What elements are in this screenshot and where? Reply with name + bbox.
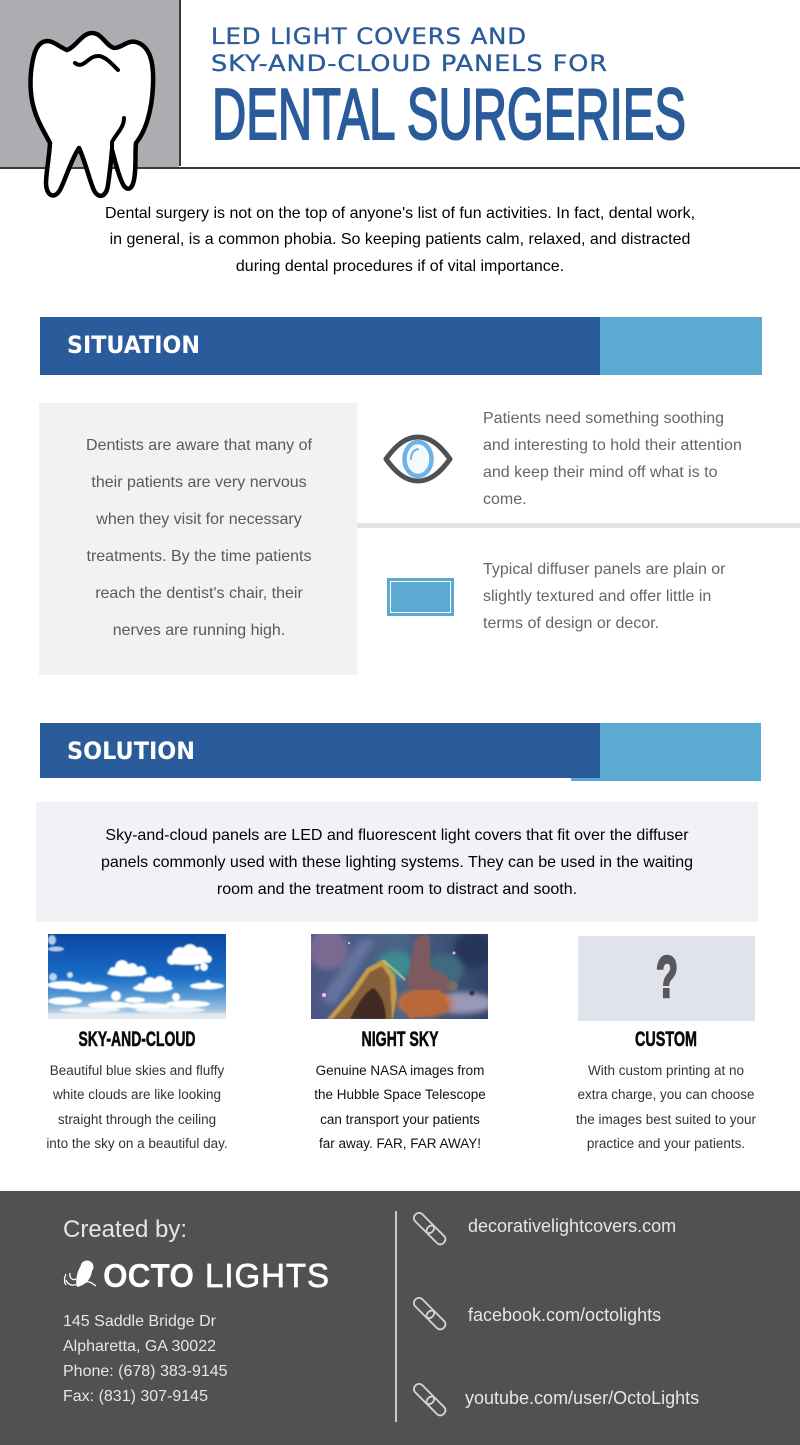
created by: Created by: [63, 1216, 187, 1243]
intro text: during dental procedures if of vital importance. [236, 258, 564, 275]
panel: situation text: treatments. By the time patients [86, 548, 312, 565]
panel: solution text [36, 802, 758, 922]
icon: tooth [30, 33, 153, 196]
icon: link website [412, 1211, 447, 1246]
panel: situation text: reach the dentist's chair, their [95, 585, 303, 602]
intro text [105, 205, 695, 275]
link: website: decorativelightcovers.com [468, 1216, 676, 1236]
column: night sky: Genuine NASA images from [316, 1063, 484, 1078]
intro text: Dental surgery is not on the top of anyone's list of fun activities. In fact, dental work, [105, 205, 695, 222]
column: custom: the images best suited to your [576, 1112, 757, 1127]
address: Fax: (831) 307-9145 [63, 1388, 208, 1405]
column: sky-and-cloud: straight through the ceiling [58, 1112, 216, 1127]
image: sky and clouds [47, 934, 226, 1019]
icon: eye [386, 437, 450, 481]
icon: link youtube [412, 1382, 447, 1417]
image: nebula [308, 930, 494, 1019]
address: Alpharetta, GA 30022 [63, 1338, 216, 1355]
link: youtube: youtube.com/user/OctoLights [465, 1388, 699, 1408]
link: facebook: facebook.com/octolights [468, 1305, 661, 1325]
panel: solution text: Sky-and-cloud panels are LED and fluorescent light covers that fit over the diffuser [105, 827, 689, 844]
address [63, 1313, 228, 1405]
title: SKY-AND-CLOUD PANELS FOR [211, 52, 608, 77]
column: night sky: NIGHT SKY [362, 1028, 438, 1051]
logo: octo lights [64, 1257, 329, 1294]
column: sky-and-cloud [46, 1028, 228, 1151]
title [211, 25, 686, 155]
text block: attention: come. [483, 491, 527, 508]
column: night sky [314, 1028, 486, 1151]
text block: attention: and keep their mind off what is to [483, 464, 718, 481]
image: custom placeholder: ? [656, 945, 678, 1010]
heading: solution [40, 723, 761, 781]
text block: attention [483, 410, 742, 508]
column: custom: extra charge, you can choose [577, 1087, 755, 1102]
icon: diffuser panel [387, 578, 454, 616]
text block: attention: and interesting to hold their attention [483, 437, 742, 454]
text block: diffuser: slightly textured and offer little in [483, 588, 711, 605]
panel: situation text: when they visit for necessary [95, 511, 302, 528]
image: custom placeholder [578, 936, 755, 1021]
text block: diffuser [483, 561, 726, 632]
column: custom: CUSTOM [635, 1028, 697, 1051]
address: Phone: (678) 383-9145 [63, 1363, 228, 1380]
column: custom: With custom printing at no [588, 1063, 744, 1078]
column: sky-and-cloud: SKY-AND-CLOUD [78, 1028, 196, 1051]
heading: solution: SOLUTION [67, 737, 195, 765]
panel: situation text: Dentists are aware that many of [86, 437, 312, 454]
intro text: in general, is a common phobia. So keeping patients calm, relaxed, and distracted [110, 231, 690, 248]
text block: diffuser: terms of design or decor. [483, 615, 659, 632]
panel: solution text: room and the treatment room to distract and sooth. [217, 881, 577, 898]
title: LED LIGHT COVERS AND [211, 25, 527, 50]
column: custom [576, 1028, 757, 1151]
column: custom: practice and your patients. [587, 1136, 745, 1151]
header panel [0, 0, 800, 169]
panel: situation text: nerves are running high. [113, 622, 285, 639]
text block: attention: Patients need something soothing [483, 410, 724, 427]
heading: situation [40, 317, 762, 375]
logo: octo lights: OCTO [103, 1257, 194, 1294]
column: night sky: can transport your patients [320, 1112, 480, 1127]
icon: link facebook [412, 1296, 447, 1331]
text block: diffuser: Typical diffuser panels are plain or [483, 561, 726, 578]
column: night sky: far away. FAR, FAR AWAY! [319, 1136, 481, 1151]
column: sky-and-cloud: white clouds are like looking [52, 1087, 221, 1102]
panel: situation text: their patients are very nervous [91, 474, 307, 491]
panel: situation text [39, 403, 357, 675]
logo: octo lights: LIGHTS [205, 1257, 329, 1294]
panel: footer [0, 1191, 800, 1445]
column: night sky: the Hubble Space Telescope [314, 1087, 486, 1102]
column: sky-and-cloud: into the sky on a beautiful day. [46, 1136, 228, 1151]
panel: solution text: panels commonly used with these lighting systems. They can be used in the waiting [101, 854, 693, 871]
address: 145 Saddle Bridge Dr [63, 1313, 217, 1330]
heading: situation: SITUATION [67, 331, 200, 359]
column: sky-and-cloud: Beautiful blue skies and fluffy [50, 1063, 225, 1078]
